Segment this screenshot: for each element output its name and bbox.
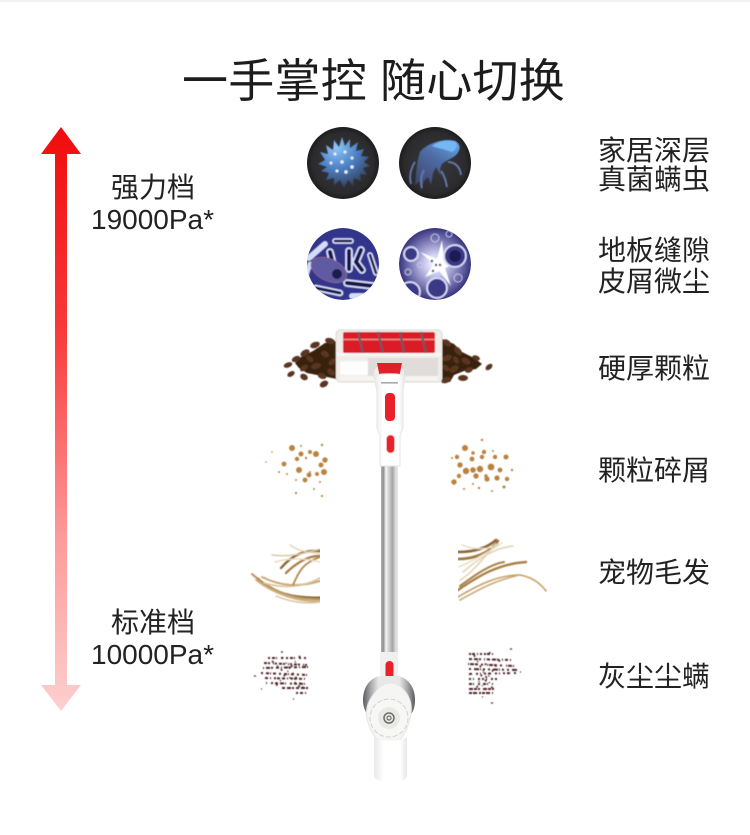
dust left [254, 652, 308, 699]
lower joint [380, 652, 398, 682]
coffee beans right [440, 338, 494, 385]
dial [370, 699, 408, 737]
crumbs right [451, 439, 513, 492]
label: hard thick particles: 硬厚颗粒 [598, 353, 710, 384]
label: standard mode: 标准档 [111, 607, 195, 638]
spiral [384, 713, 394, 723]
label: standard mode: 10000Pa* [91, 639, 214, 670]
label: floor gap dander [598, 235, 710, 297]
crumbs left [265, 444, 328, 497]
icon: virus cells [399, 228, 471, 302]
motor body [366, 683, 411, 743]
label: pet hair: 宠物毛发 [598, 557, 710, 588]
label: deep home mites: 家居深层 [598, 135, 710, 166]
floor brush head [336, 330, 442, 382]
dust right [468, 649, 521, 703]
pet hair right [458, 540, 546, 600]
icon: spiky germ [307, 127, 379, 199]
label: crumbs: 颗粒碎屑 [598, 455, 710, 486]
label: strong mode: 19000Pa* [91, 204, 214, 235]
vacuum tube [381, 460, 398, 654]
icon: dust mite [399, 127, 471, 199]
upper connector [374, 374, 405, 466]
label: dust mites: 灰尘尘螨 [598, 661, 710, 692]
icon: bacteria [306, 228, 379, 300]
neck joint [374, 363, 404, 379]
label: standard mode [91, 607, 214, 670]
motor housing ring [363, 676, 415, 718]
label: floor gap dander: 皮屑微尘 [598, 266, 710, 297]
label: deep home mites [598, 135, 710, 195]
label: strong mode [91, 172, 214, 235]
red pill button [386, 661, 394, 679]
red release button [386, 435, 394, 453]
suction power arrow [41, 127, 81, 711]
pet hair left [252, 545, 320, 603]
label: floor gap dander: 地板缝隙 [598, 235, 710, 266]
handle [374, 737, 407, 781]
vacuum cleaner [336, 330, 442, 781]
brand mark [381, 382, 398, 384]
top edge strip [0, 0, 750, 2]
red slider [385, 393, 395, 421]
coffee beans left [283, 337, 337, 389]
label: strong mode: 强力档 [111, 172, 195, 203]
label: deep home mites: 真菌螨虫 [598, 164, 710, 195]
title: 一手掌控 随心切换 [182, 55, 565, 107]
